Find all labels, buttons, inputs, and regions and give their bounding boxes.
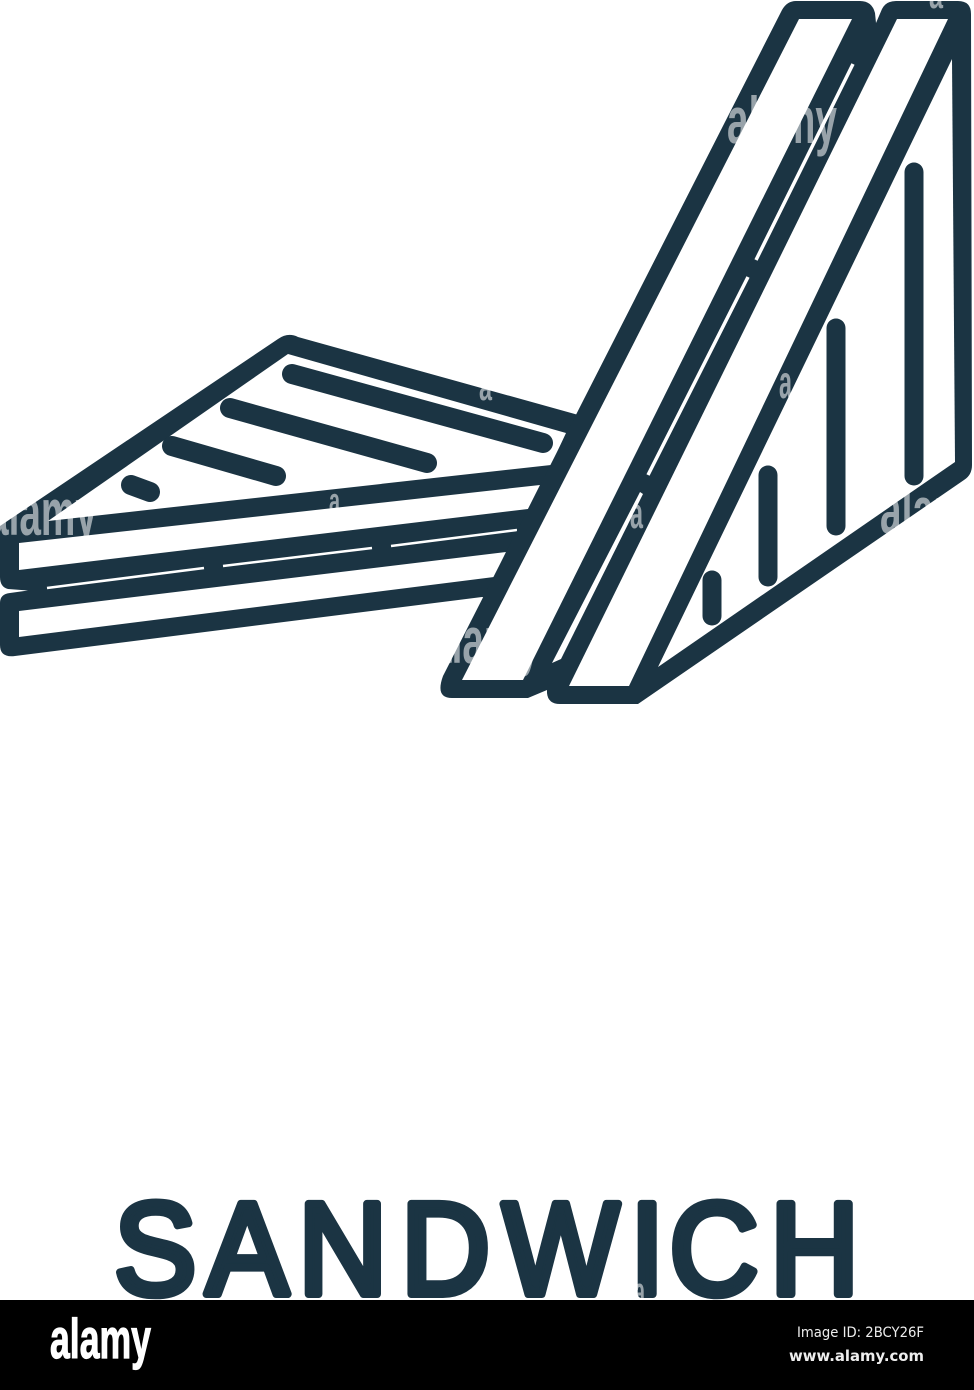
watermark fragments: a xyxy=(479,365,492,409)
logo: alamy: alamy xyxy=(50,1307,151,1370)
watermark fragments: a xyxy=(329,480,341,521)
icon: sandwich illustration xyxy=(0,0,974,704)
watermark fragments: alamy xyxy=(727,83,837,157)
title: SANDWICH xyxy=(114,1175,859,1322)
icon: standing sandwich half xyxy=(440,1,972,704)
title: a xyxy=(634,1270,645,1314)
footer bar xyxy=(0,1300,974,1390)
website: www.alamy.com xyxy=(789,1347,924,1365)
watermark fragments: a xyxy=(779,356,792,408)
watermark fragments: alamy xyxy=(430,603,540,677)
icon: lying sandwich half xyxy=(0,335,582,656)
watermark fragments xyxy=(0,0,974,677)
image id: Image ID: 2BCY26F xyxy=(797,1325,924,1341)
watermark fragments: a xyxy=(630,489,643,538)
